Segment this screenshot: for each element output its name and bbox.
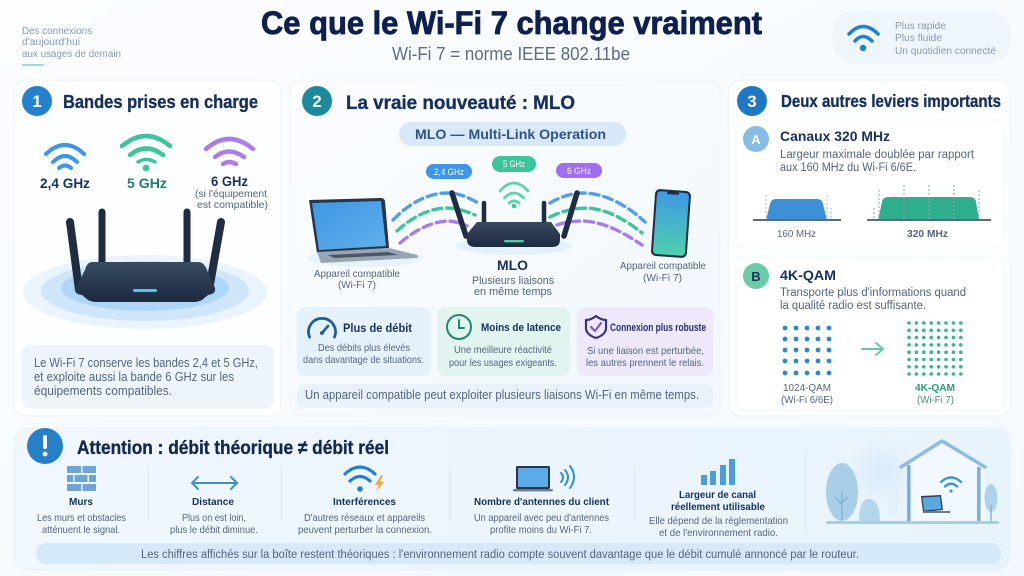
caption: 4K-QAM: 4K-QAM — [915, 382, 955, 394]
item: distance: plus le débit diminue. — [170, 524, 258, 536]
panel: attention — [14, 428, 1010, 570]
item: distance: Distance — [192, 496, 234, 508]
number badge 3: 3 — [747, 92, 757, 111]
caption: MLO — [472, 257, 554, 298]
number badge 1 — [22, 86, 52, 116]
item: largeur de canal: Largeur de canal — [679, 489, 756, 501]
icon: laptop with waves — [513, 466, 574, 491]
label 6 GHz — [195, 173, 268, 211]
item: murs: atténuent le signal. — [42, 524, 120, 536]
pill: MLO Multi-Link Operation: MLO — Multi-Link Operation — [415, 126, 606, 142]
card A: canaux 320 MHz: aux 160 MHz du Wi-Fi 6/6E. — [780, 162, 916, 174]
item: largeur de canal: Elle dépend de la réglementation — [649, 515, 788, 527]
card B: 4K-QAM: Transporte plus d'informations quand — [780, 287, 966, 299]
item: distance: Plus on est loin, — [182, 512, 246, 524]
card A: canaux 320 MHz: Canaux 320 MHz — [780, 128, 890, 144]
text box: bandes: équipements compatibles. — [34, 384, 172, 398]
caption: right device — [620, 261, 706, 284]
icon: gauge — [308, 318, 336, 337]
card: moins de latence: Une meilleure réactivité — [454, 344, 552, 356]
icon: wifi centre — [500, 183, 528, 208]
label 2,4 GHz: 2,4 GHz — [40, 175, 90, 191]
icon: wifi 2,4 GHz — [46, 145, 84, 168]
icon: wifi 6 GHz — [206, 139, 253, 164]
heading attention: Attention : débit théorique ≠ débit réel — [77, 437, 389, 459]
panel 2: MLO — [290, 80, 720, 416]
card A: canaux 320 MHz — [736, 120, 1004, 248]
card: connexion plus robuste — [577, 307, 713, 376]
card B: 4K-QAM — [736, 258, 1004, 410]
badge text: Plus rapide — [895, 21, 946, 32]
strip: résumé MLO — [297, 384, 713, 408]
item: distance — [170, 477, 258, 536]
chart: 320 MHz — [867, 185, 991, 240]
text box: bandes: et exploite aussi la bande 6 GHz sur les — [34, 370, 234, 384]
card B: 4K-QAM: la qualité radio est suffisante. — [780, 300, 926, 312]
item: antennes: Un appareil avec peu d'antennes — [474, 512, 609, 524]
number badge 2 — [302, 86, 332, 116]
item: antennes: profite moins du Wi-Fi 7. — [490, 524, 592, 536]
card: moins de latence — [437, 307, 570, 376]
item: largeur de canal — [649, 459, 788, 539]
card: connexion plus robuste: Si une liaison est perturbée, — [587, 345, 704, 357]
caption: 1024-QAM: 1024-QAM — [783, 382, 831, 394]
card: connexion plus robuste: Connexion plus robuste — [610, 322, 706, 334]
icon: wifi and lightning — [345, 467, 384, 492]
panel 3: deux autres leviers — [729, 80, 1010, 416]
caption: 1024-QAM — [781, 382, 833, 406]
item: interférences: D'autres réseaux et appareils — [304, 512, 425, 524]
item: interférences: peuvent perturber la connexion. — [298, 524, 432, 536]
item: interférences: Interférences — [333, 496, 396, 508]
strip: résumé MLO: Un appareil compatible peut exploiter plusieurs liaisons Wi-Fi en même temps. — [305, 388, 699, 402]
caption: MLO: en même temps — [474, 286, 552, 298]
badge A: A — [751, 132, 761, 147]
icon: clock — [447, 315, 471, 339]
subtitle: Wi-Fi 7 = norme IEEE 802.11be — [392, 44, 630, 64]
pill: 2,4 GHz — [426, 164, 472, 179]
chart: 160 MHz — [753, 195, 841, 240]
arrow: vers 4K-QAM — [862, 343, 883, 355]
badge B — [743, 263, 769, 289]
text box: bandes — [22, 345, 274, 408]
card: connexion plus robuste: les autres prennent le relais. — [586, 357, 704, 369]
panel 1: bandes — [14, 80, 281, 416]
caption: MLO: Plusieurs liaisons — [472, 275, 554, 287]
tagline top left: d'aujourd'hui — [22, 37, 80, 48]
illustration: router — [23, 212, 267, 329]
badge text: Plus fluide — [895, 33, 942, 44]
illustration: central router — [452, 193, 577, 255]
card: plus de débit — [297, 307, 431, 376]
card: plus de débit: Plus de débit — [343, 323, 412, 335]
card A: canaux 320 MHz: Largeur maximale doublée par rapport — [780, 149, 975, 161]
label 5 GHz: 5 GHz — [127, 175, 167, 191]
icon: wall — [67, 466, 96, 491]
item: murs: Murs — [69, 496, 93, 508]
card: moins de latence: Moins de latence — [481, 322, 561, 334]
label 6 GHz: 6 GHz — [211, 173, 248, 189]
caption: 1024-QAM: (Wi-Fi 6/6E) — [781, 394, 833, 406]
chart: 160 MHz: 160 MHz — [777, 229, 816, 240]
icon: wifi 5 GHz — [122, 136, 170, 171]
item: interférences — [298, 467, 432, 536]
icon: exclamation — [27, 428, 63, 464]
heading 2: La vraie nouveauté : MLO — [346, 92, 575, 114]
icon: home wifi — [941, 478, 961, 493]
pill: 6 GHz — [556, 163, 602, 178]
caption: left device — [314, 269, 400, 291]
item: largeur de canal: réellement utilisable — [671, 501, 765, 513]
bush — [859, 499, 880, 522]
caption: left device: Appareil compatible — [314, 269, 400, 280]
card: plus de débit: dans davantage de situations. — [303, 354, 424, 366]
card: moins de latence: pour les usages exigeants. — [449, 357, 557, 369]
icon: wifi — [849, 26, 878, 51]
tagline top left: Des connexions — [22, 26, 92, 37]
tagline top left: aux usages de demain — [22, 49, 121, 60]
chart: constellation 1024-QAM — [783, 326, 831, 375]
number badge 3 — [737, 86, 767, 116]
badge text — [895, 21, 996, 57]
heading 1: Bandes prises en charge — [63, 92, 258, 112]
badge A — [743, 126, 769, 152]
item: antennes: Nombre d'antennes du client — [474, 496, 609, 508]
illustration: house — [826, 441, 999, 524]
title: Ce que le Wi-Fi 7 change vraiment — [261, 5, 762, 41]
icon: home laptop — [921, 495, 950, 513]
icon: shield — [586, 316, 606, 338]
number badge 2: 2 — [312, 92, 322, 111]
pill: 5 GHz: 5 GHz — [503, 159, 525, 170]
caption: 4K-QAM — [915, 382, 955, 406]
card B: 4K-QAM: 4K-QAM — [780, 267, 836, 283]
caption: left device: (Wi-Fi 7) — [338, 280, 376, 291]
pill: 2,4 GHz: 2,4 GHz — [434, 167, 464, 178]
item: murs: Les murs et obstacles — [37, 512, 126, 524]
item: largeur de canal: et de l'environnement radio. — [659, 527, 778, 539]
tree small — [984, 484, 998, 522]
item: murs — [37, 466, 126, 536]
pill: 5 GHz — [492, 156, 536, 172]
card: plus de débit: Des débits plus élevés — [318, 342, 410, 354]
chart: constellation 4K-QAM — [909, 323, 964, 374]
strip: conclusion — [36, 543, 1001, 564]
pill: 6 GHz: 6 GHz — [567, 166, 591, 177]
chart: 320 MHz: 320 MHz — [907, 229, 948, 240]
badge B: B — [751, 269, 761, 284]
badge text: Un quotidien connecté — [895, 46, 996, 57]
badge top right — [832, 10, 1011, 64]
text box: bandes: Le Wi-Fi 7 conserve les bandes 2,4 et 5 GHz, — [34, 356, 258, 370]
pill: MLO Multi-Link Operation — [399, 122, 626, 146]
illustration: laptop — [307, 198, 423, 267]
strip: conclusion: Les chiffres affichés sur la boîte restent théoriques : l'environnement radio compte souvent davantage que le débit cumulé annoncé par le routeur. — [141, 549, 859, 561]
tagline top left — [22, 26, 121, 66]
label 6 GHz: (si l'équipement — [195, 189, 267, 200]
label 6 GHz: est compatible) — [197, 200, 268, 211]
icon: double arrow — [192, 477, 237, 489]
tree large — [826, 463, 858, 521]
number badge 1: 1 — [32, 92, 42, 111]
links: left signal arcs — [393, 193, 478, 243]
item: antennes — [474, 466, 609, 536]
icon: bars — [701, 459, 735, 485]
caption: 4K-QAM: (Wi-Fi 7) — [917, 394, 954, 406]
caption: right device: Appareil compatible — [620, 261, 706, 272]
links: right signal arcs — [550, 193, 645, 245]
caption: MLO: MLO — [497, 257, 528, 273]
caption: right device: (Wi-Fi 7) — [643, 273, 682, 284]
illustration: phone — [651, 189, 691, 258]
